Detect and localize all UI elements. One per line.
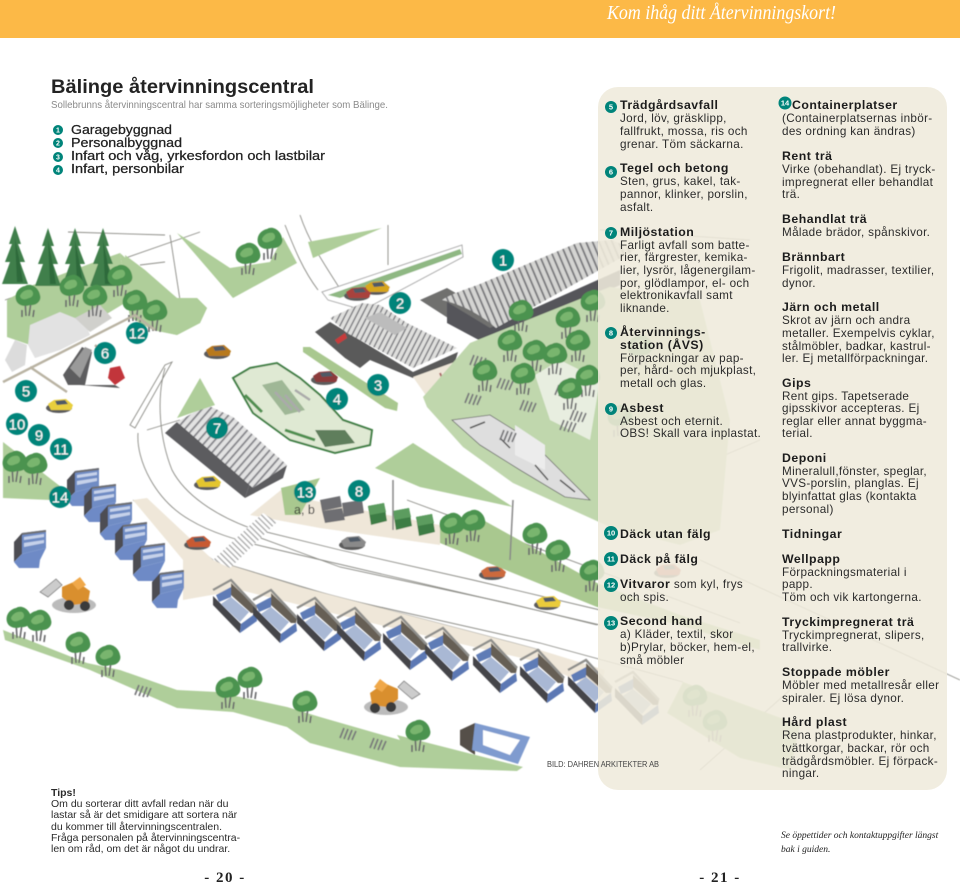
legend column 1: stations 5 to 9: grenar. Töm säckarna. (620, 138, 744, 151)
opening hours note: bak i guiden. (781, 845, 830, 855)
building list: Personalbyggnad (71, 136, 182, 150)
legend column 1: stations 5 to 9 (605, 98, 761, 440)
green lawn by the road (281, 478, 760, 650)
legend column 1: stations 5 to 9: rier, färgrester, kemika- (620, 251, 748, 264)
illustration: aerial site plan (2, 215, 960, 771)
legend column 2: containers: Brännbart (782, 250, 845, 264)
tips text block: Tips! (51, 787, 76, 799)
tips text block: du kommer till återvinningscentralen. (51, 821, 222, 833)
legend column 2: containers: gipsskivor accepteras. Ej (782, 402, 920, 415)
legend column 1: stations 5 to 9: station (ÅVS) (620, 337, 704, 352)
legend column 1: stations 5 to 9: 9 (609, 404, 613, 414)
wheel loaders (40, 577, 420, 715)
number markers on the map: 8 (355, 484, 363, 500)
number markers on the map: 10 (9, 416, 25, 434)
legend column 2: containers: trä. (782, 188, 800, 201)
legend column 2: containers: des ordning kan ändras) (782, 125, 916, 138)
green patch upper middle (177, 228, 382, 298)
legend column 2: containers: trädgårdsmöbler. Ej förpack- (782, 755, 938, 768)
building 1: garage (420, 240, 635, 346)
legend column 2: containers: Containerplatser (792, 98, 898, 112)
legend column 1: stations 10 to 13: 12 (607, 580, 615, 590)
legend column 1: stations 5 to 9: liknande. (620, 302, 670, 315)
tips text block: lastar så är det smidigare att sortera när (51, 809, 238, 821)
legend column 1: stations 10 to 13: och spis. (620, 591, 669, 604)
number markers on the map: 11 (53, 442, 69, 458)
number markers on the map: 2 (396, 296, 404, 312)
number markers on the map (6, 249, 514, 517)
legend column 2: containers: Målade brädor, spånskivor. (782, 226, 930, 239)
legend column 2: containers: stålmöbler, badkar, kastrul- (782, 340, 931, 353)
legend column 2: containers (778, 96, 939, 780)
number markers on the map: 7 (213, 420, 221, 438)
parking lot with cars (322, 245, 463, 310)
legend column 2: containers: Gips (782, 376, 811, 390)
legend column 1: stations 5 to 9: Asbest och eternit. (620, 415, 723, 428)
legend column 1: stations 10 to 13: Second hand (620, 614, 703, 628)
legend column 2: containers: Rent gips. Tapetserade (782, 390, 909, 403)
legend column 2: containers: personal) (782, 503, 834, 516)
number markers on the map: 6 (101, 346, 109, 362)
legend column 1: stations 10 to 13: a) Kläder, textil, skor (620, 628, 733, 641)
legend column 1: stations 5 to 9: Sten, grus, kakel, tak- (620, 175, 741, 188)
building 7 (165, 378, 287, 498)
legend column 2: containers: Tidningar (782, 527, 842, 541)
top banner (0, 0, 960, 38)
legend column 2: containers: Tryckimpregnerat, slipers, (782, 629, 925, 642)
legend column 2: containers: Rent trä (782, 149, 832, 163)
legend column 2: containers: blyinfattat glas (kontakta (782, 490, 917, 503)
legend column 1: stations 5 to 9: Miljöstation (620, 225, 694, 239)
green patches at left edge (3, 442, 65, 500)
legend column 2: containers: Mineralull,fönster, speglar, (782, 465, 927, 478)
beige service yard (133, 498, 605, 690)
legend column 1: stations 5 to 9: 5 (609, 102, 613, 112)
image credit: BILD: DAHREN ARKITEKTER AB (547, 759, 659, 769)
number markers on the map: a, b (294, 503, 315, 517)
legend column 1: stations 10 to 13: 10 (607, 528, 615, 538)
recycling bins (320, 496, 435, 536)
green island at number 4 (233, 363, 372, 453)
legend column 1: stations 5 to 9: fallfrukt, mossa, ris och (620, 125, 748, 138)
legend column 1: stations 5 to 9: elektronikavfall samt (620, 289, 733, 302)
container column left (14, 468, 184, 608)
number markers on the map: 4 (333, 392, 341, 408)
building list: 3 (56, 154, 60, 162)
legend column 1: stations 5 to 9: Förpackningar av pap- (620, 352, 744, 365)
legend column 2: containers: Tryckimpregnerat trä (782, 615, 914, 629)
legend column 1: stations 10 to 13: Vitvaror som kyl, frys (620, 577, 743, 591)
legend column 1: stations 5 to 9: 7 (609, 228, 613, 238)
beige legend panel (598, 87, 947, 790)
legend column 2: containers: (Containerplatsernas inbör- (782, 112, 933, 125)
legend column 2: containers: Stoppade möbler (782, 665, 890, 679)
number markers on the map: 12 (129, 326, 145, 342)
legend column 2: containers: dynor. (782, 277, 816, 290)
legend column 2: containers: reglar eller annat byggma- (782, 415, 927, 428)
number markers on the map: 9 (35, 428, 43, 444)
legend column 2: containers: tvättkorgar, backar, rör och (782, 742, 930, 755)
legend column 2: containers: ler. Ej metallförpackningar. (782, 352, 928, 365)
container row stepped (213, 580, 659, 725)
legend column 1: stations 5 to 9: Tegel och betong (620, 161, 729, 175)
legend column 2: containers: papp. (782, 578, 813, 591)
building list: 2 (56, 140, 60, 148)
legend column 1: stations 5 to 9: por, glödlampor, el- och (620, 277, 749, 290)
legend column 1: stations 5 to 9: Trädgårdsavfall (620, 98, 718, 112)
legend column 1: stations 5 to 9: metall och glas. (620, 377, 706, 390)
legend column 1: stations 10 to 13: 13 (607, 618, 615, 628)
building list: Infart och våg, yrkesfordon och lastbilar (71, 149, 325, 163)
legend column 1: stations 5 to 9: 8 (609, 328, 613, 338)
station 6 stairs and truck (63, 347, 125, 388)
building list: Garagebyggnad (71, 123, 172, 137)
building list (53, 123, 325, 176)
legend column 2: containers: metaller. Exempelvis cyklar, (782, 327, 935, 340)
opening hours note: Se öppettider och kontaktuppgifter längst (781, 830, 939, 841)
fence lines at stations 5, 6, 12 (3, 315, 155, 392)
tips text block: Fråga personalen på återvinningscentra- (51, 832, 241, 844)
legend column 1: stations 5 to 9: asfalt. (620, 201, 654, 214)
legend column 2: containers: Behandlat trä (782, 212, 867, 226)
legend column 2: containers: Frigolit, madrasser, textilier, (782, 264, 934, 277)
cars on the site (46, 345, 681, 610)
legend column 2: containers: Möbler med metallresår eller (782, 679, 939, 692)
number markers on the map: 3 (374, 378, 382, 394)
bottom green strip with trees (3, 607, 800, 771)
legend column 1: stations 5 to 9: 6 (609, 168, 613, 176)
lamp posts (393, 480, 513, 560)
legend column 1: stations 5 to 9: OBS! Skall vara inplastat. (620, 427, 761, 440)
legend column 1: stations 10 to 13: Däck på fälg (620, 552, 698, 566)
legend column 1: stations 5 to 9: Asbest (620, 401, 664, 415)
tips text block: len om råd, om det är något du undrar. (51, 843, 230, 855)
green triangle island (375, 443, 513, 507)
lone container (460, 723, 530, 764)
green strip at number 3 (303, 347, 398, 411)
legend column 1: stations 5 to 9: lier, lysrör, lågenergilam- (620, 264, 756, 277)
crosswalk (213, 513, 277, 568)
tips text block: Om du sorterar ditt avfall redan när du (51, 798, 229, 810)
legend column 2: containers: spiraler. Ej lösa dynor. (782, 692, 904, 705)
legend column 2: containers: impregnerat eller behandlat (782, 176, 934, 189)
title: Bälinge återvinningscentral (51, 77, 314, 98)
subtitle: Sollebrunns återvinningscentral har samma sorteringsmöjligheter som Bälinge. (51, 99, 388, 111)
legend column 2: containers: Hård plast (782, 715, 847, 729)
building list: Infart, personbilar (71, 162, 184, 176)
legend column 2: containers: Förpackningsmaterial i (782, 566, 907, 579)
legend column 2: containers: 14 (781, 98, 790, 108)
legend column 2: containers: Virke (obehandlat). Ej tryck- (782, 163, 936, 176)
legend column 1: stations 10 to 13: 11 (607, 554, 615, 564)
legend column 2: containers: terial. (782, 427, 813, 440)
building list: 1 (56, 128, 60, 134)
building 2: staff building (315, 303, 473, 397)
legend column 1: stations 10 to 13 (604, 526, 755, 667)
legend column 1: stations 5 to 9: Farligt avfall som batte- (620, 239, 750, 252)
legend column 2: containers: Skrot av järn och andra (782, 314, 911, 327)
legend column 2: containers: Deponi (782, 451, 827, 465)
green forest area upper left (2, 226, 207, 372)
legend column 1: stations 10 to 13: små möbler (620, 654, 684, 667)
top banner: Kom ihåg ditt Återvinningskort! (606, 2, 836, 24)
legend column 2: containers: VVS-porslin, planglas. Ej (782, 477, 919, 490)
number markers on the map: 13 (297, 484, 313, 502)
legend column 1: stations 5 to 9: per, hård- och mjukplast, (620, 364, 756, 377)
legend column 2: containers: Rena plastprodukter, hinkar, (782, 729, 937, 742)
legend column 1: stations 5 to 9: pannor, klinker, porslin, (620, 188, 748, 201)
legend column 2: containers: Töm och vik kartongerna. (782, 591, 922, 604)
forest hillside with rocks (423, 287, 730, 545)
building list: 4 (56, 168, 60, 174)
legend column 1: stations 10 to 13: Däck utan fälg (620, 527, 711, 541)
legend column 1: stations 5 to 9: Jord, löv, gräsklipp, (620, 112, 727, 125)
legend column 2: containers: Wellpapp (782, 552, 840, 566)
road lines (5, 215, 960, 770)
number markers on the map: 14 (52, 490, 68, 506)
legend column 1: stations 10 to 13: b)Prylar, böcker, hem-el, (620, 641, 755, 654)
legend column 2: containers: trallvirke. (782, 641, 832, 654)
legend column 2: containers: Järn och metall (782, 300, 880, 314)
legend column 1: stations 5 to 9: Återvinnings- (620, 324, 706, 339)
legend column 2: containers: ningar. (782, 767, 819, 780)
number markers on the map: 1 (499, 252, 507, 270)
beige recycling station plaza (250, 490, 440, 545)
number markers on the map: 5 (22, 384, 30, 400)
